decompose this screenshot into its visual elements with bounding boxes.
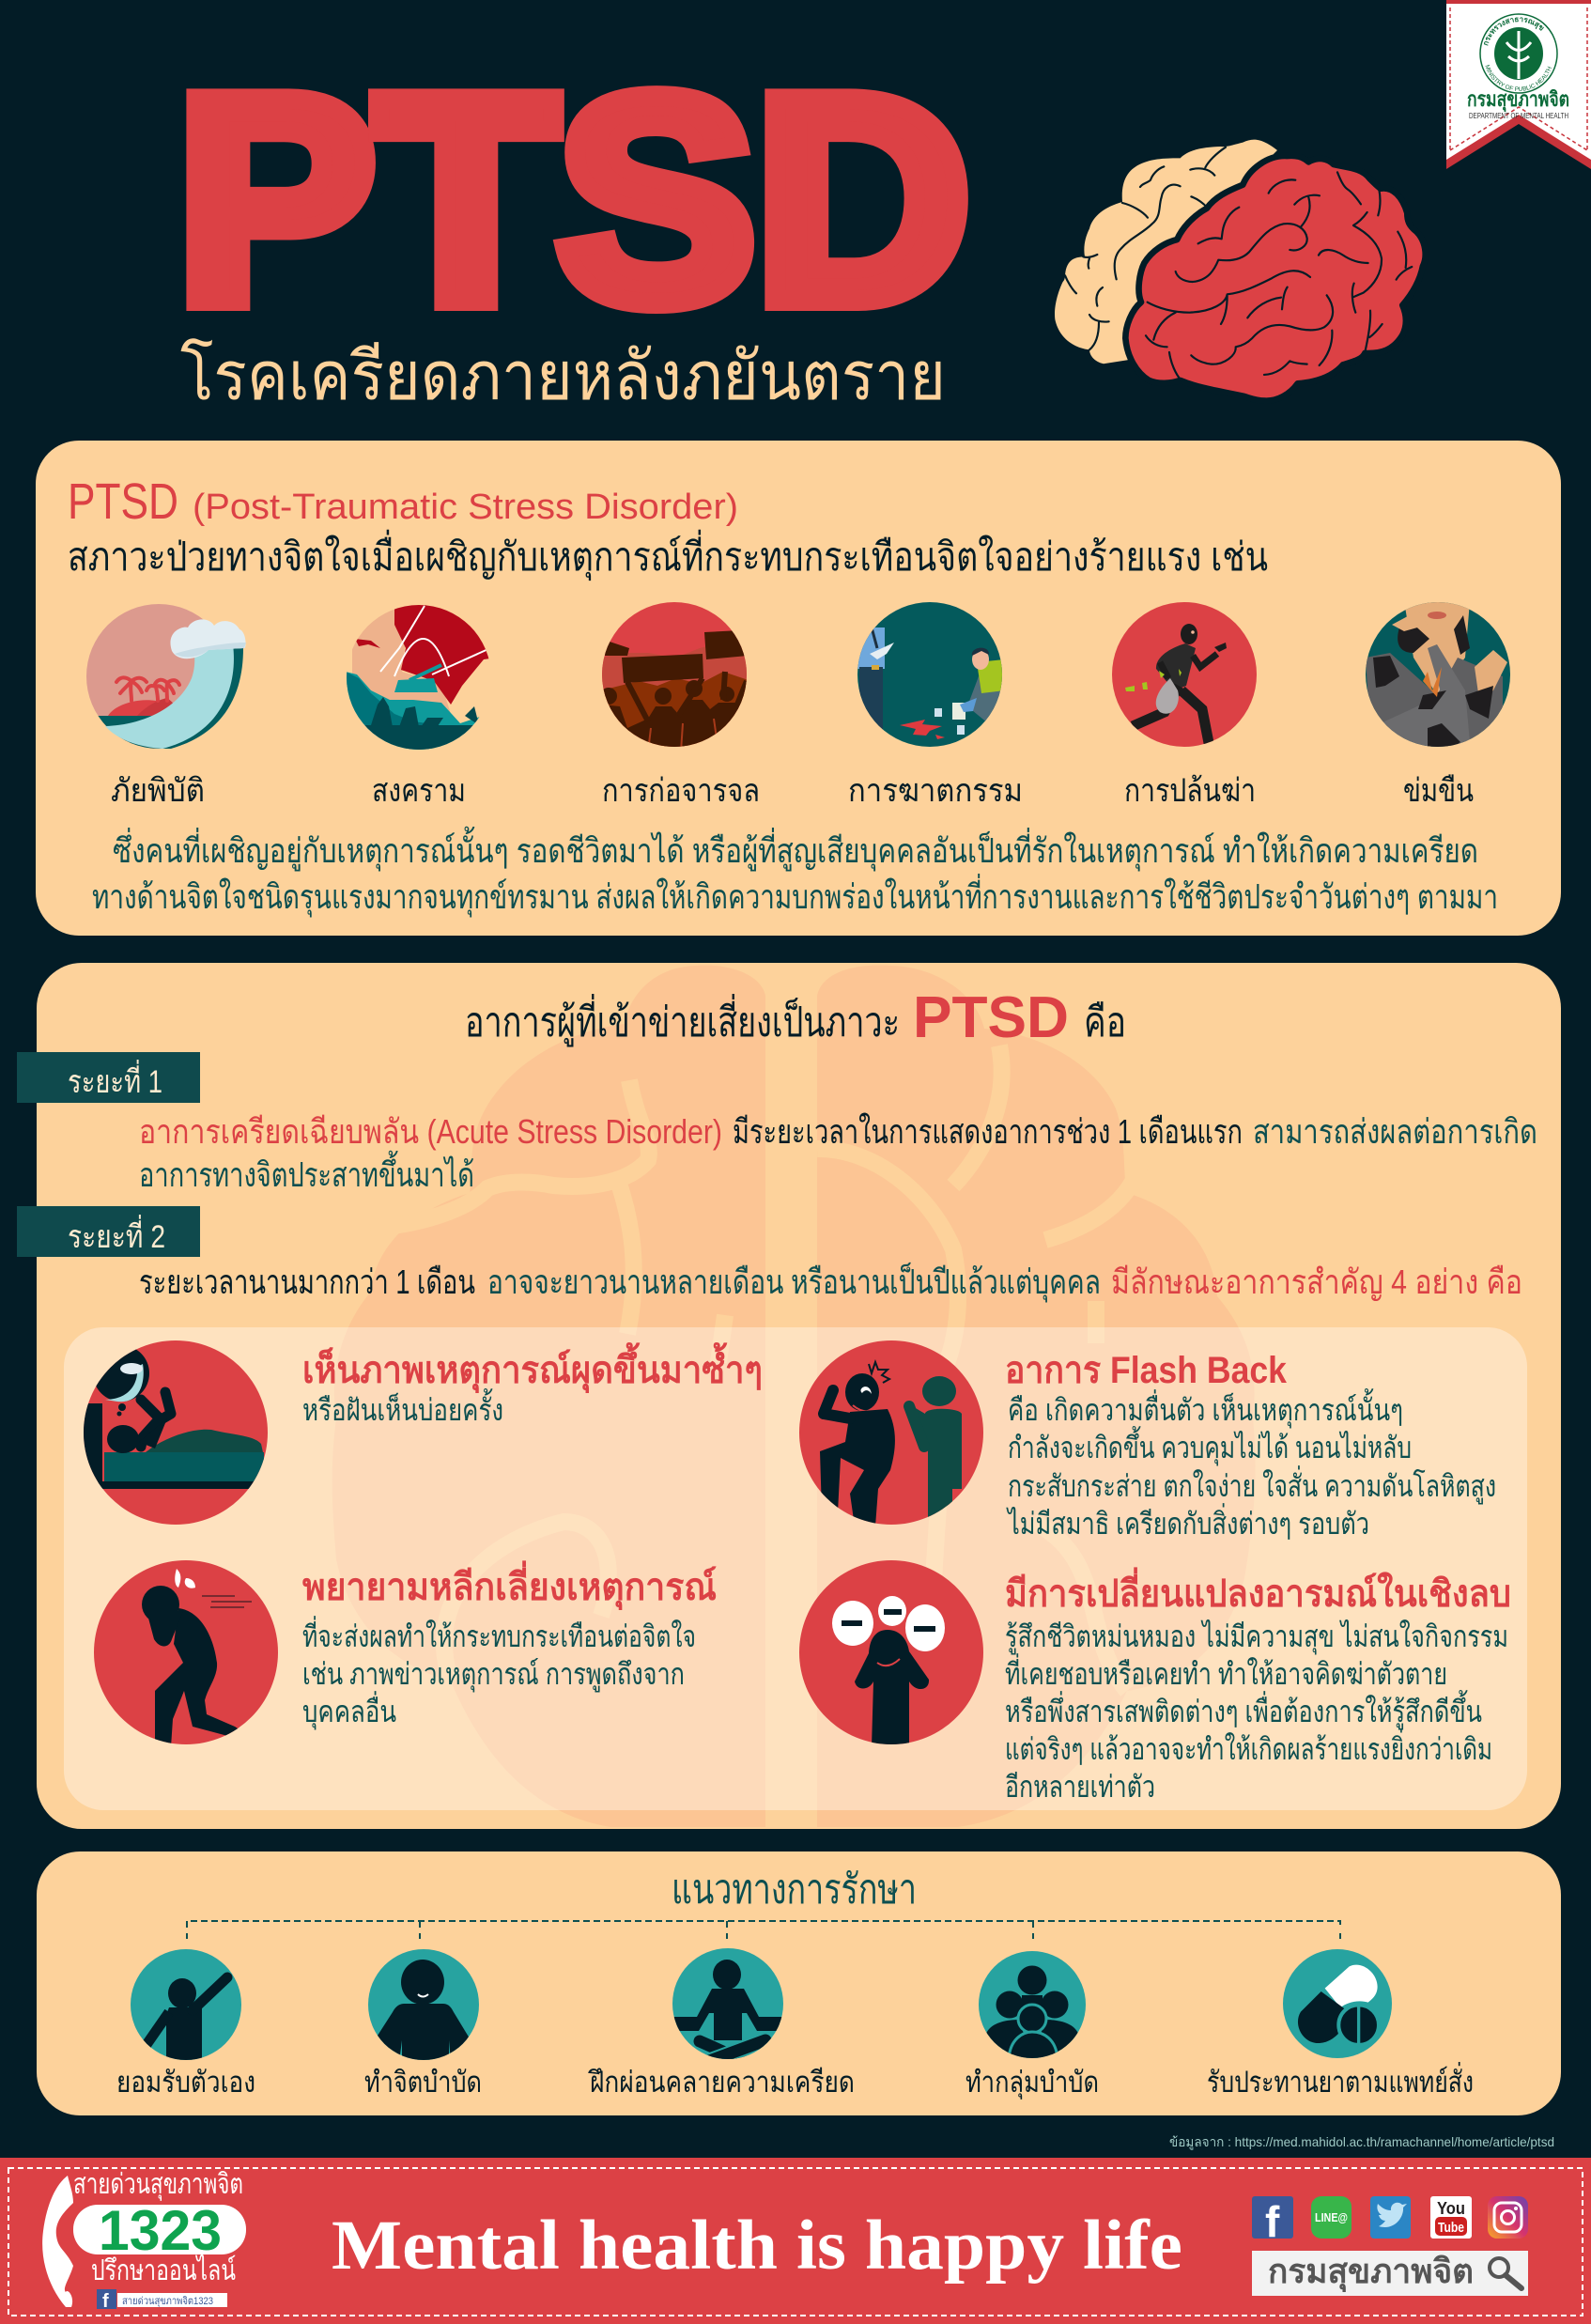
badge: hotline number 1323: 1323 [99, 2199, 222, 2262]
text: stage 1 description: อาการทางจิตประสาทขึ้นมาได้ [139, 1150, 474, 1194]
title: PTSD: PTSD [177, 37, 970, 364]
text: symptom 1 recurrent images: เห็นภาพเหตุการณ์ผุดขึ้นมาซ้ำๆ [302, 1342, 763, 1394]
text: symptom 2 avoidance: เช่น ภาพข่าวเหตุการณ์ การพูดถึงจาก [302, 1657, 685, 1693]
heading: symptoms title: PTSD [913, 985, 1069, 1050]
icon: youtube: You [1437, 2199, 1465, 2218]
heading: treatment: แนวทางการรักษา [672, 1867, 917, 1913]
text: symptom 3 flash back: ไม่มีสมาธิ เครียดกับสิ่งต่างๆ รอบตัว [1006, 1503, 1369, 1541]
text: explanation paragraph [92, 826, 1498, 918]
icon: relaxation meditation [669, 1948, 784, 2063]
label: terrorism: การก่อจารจล [602, 773, 760, 809]
icon: natural disaster wave [85, 604, 246, 753]
icon: nightmare in bed [80, 1340, 272, 1525]
text: symptom 3 flash back: คือ เกิดความตื่นตัว เห็นเหตุการณ์นั้นๆ [1008, 1388, 1403, 1429]
tab: stage 1: ระยะที่ 1 [68, 1060, 162, 1100]
text: symptom 1 recurrent images: หรือฝันเห็นบ่อยครั้ง [302, 1388, 503, 1427]
icon: negative mood person [799, 1560, 983, 1747]
text: symptom 4 mood change: ที่เคยชอบหรือเคยทำ ทำให้อาจคิดฆ่าตัวตาย [1005, 1653, 1447, 1691]
icon: group therapy [979, 1951, 1086, 2062]
facebook page search box: f [102, 2291, 109, 2312]
brain watermark [332, 965, 1256, 1827]
label: group therapy: ทำกลุ่มบำบัด [965, 2066, 1099, 2100]
text: symptom 4 mood change: อีกหลายเท่าตัว [1005, 1770, 1155, 1804]
heading: PTSD full name: (Post-Traumatic Stress Disorder) [193, 488, 738, 527]
panel: four main symptoms [64, 1327, 1527, 1810]
icon: facebook: f [1265, 2197, 1280, 2246]
label: relaxation: ฝึกผ่อนคลายความเครียด [587, 2066, 855, 2099]
logo ribbon: Department of Mental Health: MINISTRY OF PUBLIC HEALTH [1486, 64, 1552, 91]
heading: PTSD full name [68, 473, 738, 530]
icon: psychotherapy [368, 1949, 479, 2067]
text: symptom 3 flash back [1005, 1350, 1496, 1541]
icon: person avoiding [94, 1560, 278, 1747]
text: stage 2 description: มีลักษณะอาการสำคัญ 4 อย่าง คือ [1111, 1263, 1522, 1301]
facebook page search box: สายด่วนสุขภาพจิต1323 [122, 2296, 213, 2307]
label: medication: รับประทานยาตามแพทย์สั่ง [1207, 2062, 1474, 2099]
icon: flashback startled person [799, 1340, 983, 1526]
logo ribbon: Department of Mental Health: กระทรวงสาธารณสุข [1484, 17, 1544, 46]
label: robbery: การปล้นฆ่า [1124, 773, 1256, 809]
text: symptom 2 avoidance: บุคคลอื่น [302, 1691, 396, 1730]
text: stage 1 description: มีระยะเวลาในการแสดงอาการช่วง 1 เดือนแรก [733, 1112, 1243, 1151]
text: symptom 4 mood change [1005, 1567, 1511, 1804]
heading: symptoms title [465, 985, 1126, 1050]
icon: medication [1283, 1949, 1392, 2058]
text: stage 2 description: ระยะเวลานานมากกว่า 1 เดือน [139, 1263, 475, 1301]
subtitle: Thai name of the disorder: โรคเครียดภายหลังภยันตราย [180, 337, 946, 414]
label: war: สงคราม [372, 773, 466, 809]
text: stage 2 description [139, 1261, 1522, 1303]
tab: stage 1 [17, 1052, 200, 1103]
logo ribbon: Department of Mental Health [1446, 0, 1591, 169]
text: stage 1 description: อาการเครียดเฉียบพลัน (Acute Stress Disorder) [139, 1112, 722, 1151]
text: source credit: ข้อมูลจาก : https://med.mahidol.ac.th/ramachannel/home/article/ptsd [1169, 2134, 1554, 2150]
text: hotline label: สายด่วนสุขภาพจิต [73, 2169, 243, 2202]
icon: telephone handset [42, 2176, 73, 2307]
icon: murder scene [857, 602, 1005, 747]
heading: symptoms title: อาการผู้ที่เข้าข่ายเสี่ยงเป็นภาวะ [465, 993, 900, 1047]
text: definition line: สภาวะป่วยทางจิตใจเมื่อเผชิญกับเหตุการณ์ที่กระทบกระเทือนจิตใจอย่างร้ายแรง เช่น [68, 530, 1268, 581]
text: symptom 3 flash back: อาการ Flash Back [1005, 1350, 1288, 1391]
text: symptom 2 avoidance: ที่จะส่งผลทำให้กระทบกระเทือนต่อจิตใจ [302, 1616, 696, 1653]
tab: stage 2 [17, 1206, 200, 1257]
tab: stage 2: ระยะที่ 2 [68, 1215, 165, 1255]
text: stage 2 description: อาจจะยาวนานหลายเดือน หรือนานเป็นปีแล้วแต่บุคคล [487, 1261, 1101, 1303]
heading: symptoms title: คือ [1084, 999, 1126, 1046]
icon: youtube: Tube [1438, 2220, 1464, 2236]
icon: self acceptance [131, 1949, 241, 2067]
icon: facebook [1252, 2196, 1293, 2246]
icon: instagram [1488, 2196, 1528, 2239]
text: symptom 3 flash back: กำลังจะเกิดขึ้น ควบคุมไม่ได้ นอนไม่หลับ [1008, 1426, 1412, 1466]
icon: assault [1366, 601, 1510, 751]
label: psychotherapy: ทำจิตบำบัด [364, 2066, 482, 2099]
label: disaster: ภัยพิบัติ [111, 773, 205, 809]
icon: war [347, 605, 488, 750]
panel: what is PTSD [36, 441, 1561, 936]
connector: dashed bracket linking treatments [187, 1921, 1340, 1939]
label: murder: การฆาตกรรม [848, 773, 1023, 809]
label: assault: ข่มขืน [1403, 773, 1474, 809]
panel: treatment [37, 1851, 1561, 2115]
footer banner [0, 2158, 1591, 2324]
text: symptom 2 avoidance: พยายามหลีกเลี่ยงเหตุการณ์ [302, 1560, 717, 1611]
text: online counselling: ปรึกษาออนไลน์ [91, 2254, 236, 2286]
icon: line [1311, 2196, 1352, 2239]
text: symptom 4 mood change: มีการเปลี่ยนแปลงอารมณ์ในเชิงลบ [1005, 1567, 1511, 1615]
facebook page search box [97, 2289, 227, 2312]
icon: line: LINE@ [1315, 2210, 1348, 2224]
text: symptom 2 avoidance [302, 1560, 717, 1730]
slogan: Mental health is happy life [332, 2207, 1182, 2285]
heading: PTSD full name: PTSD [68, 473, 178, 530]
icon: robbery thief [1112, 602, 1257, 748]
icon: terrorism crowd [600, 602, 751, 751]
icon: brain illustration [1055, 140, 1426, 401]
label: self acceptance: ยอมรับตัวเอง [116, 2066, 255, 2099]
text: symptom 4 mood change: หรือพึ่งสารเสพติดต่างๆ เพื่อต้องการให้รู้สึกดีขึ้น [1005, 1690, 1482, 1730]
panel: symptoms [17, 963, 1561, 1829]
text: symptom 1 recurrent images [302, 1342, 763, 1427]
search box: department name [1252, 2251, 1528, 2296]
icon: youtube [1430, 2196, 1472, 2239]
text: stage 1 description [139, 1112, 1537, 1194]
icon: twitter [1370, 2196, 1411, 2239]
search box: department name: กรมสุขภาพจิต [1268, 2252, 1474, 2293]
